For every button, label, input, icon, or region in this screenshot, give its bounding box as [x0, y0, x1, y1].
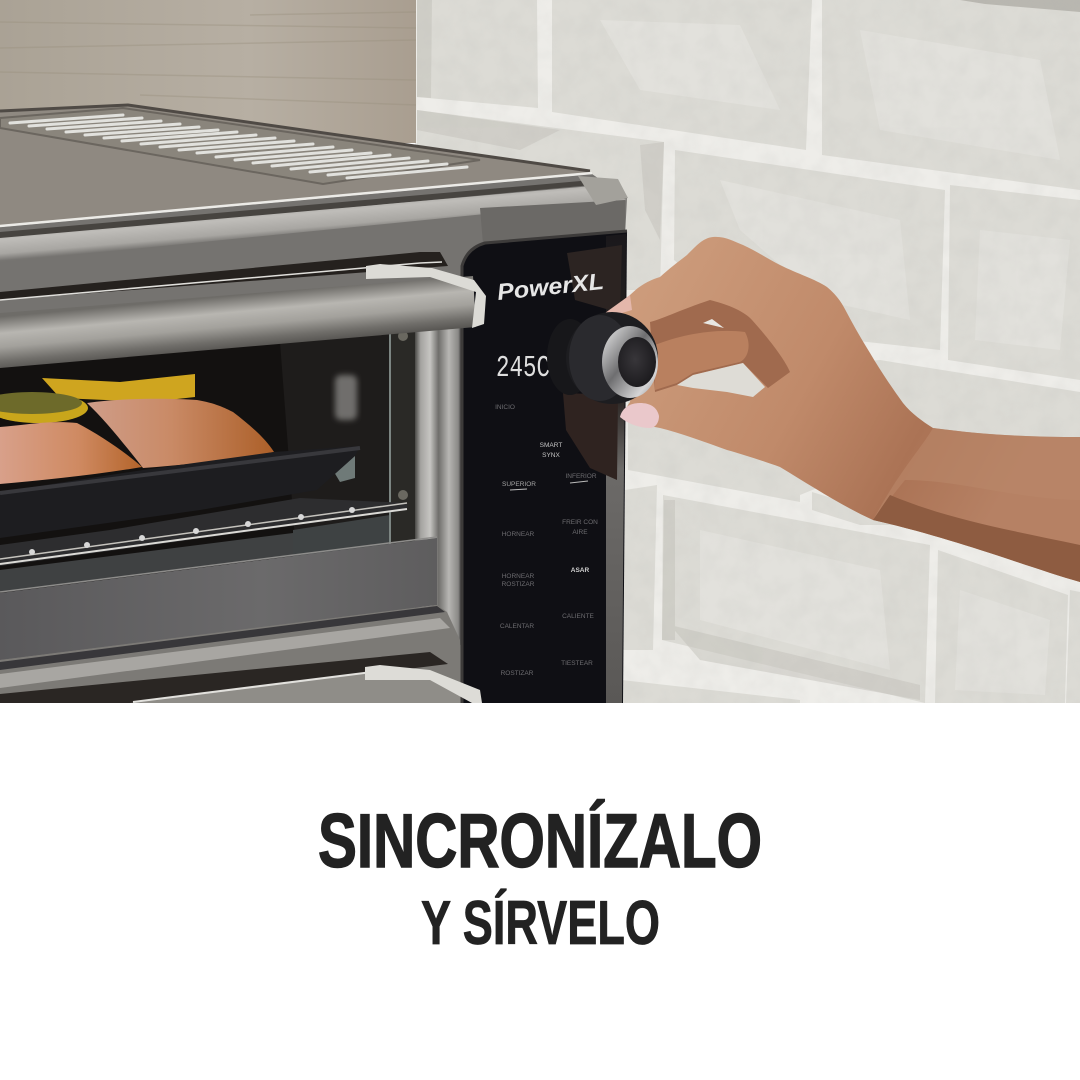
lower handle body	[135, 671, 467, 703]
middle finger	[655, 331, 749, 390]
panel button labels: TIESTEAR	[561, 660, 593, 667]
front frame backing	[0, 174, 627, 703]
white caption panel	[0, 703, 1080, 1080]
dial rear cylinder	[547, 319, 593, 395]
panel button labels: INFERIOR	[565, 473, 597, 480]
wood grain	[0, 12, 416, 105]
subheading: Y SÍRVELO	[421, 889, 660, 958]
lower door slot	[0, 652, 448, 703]
upper door slot	[0, 252, 448, 300]
panel button labels: AIRE	[572, 529, 588, 536]
panel button labels: SUPERIOR	[502, 481, 536, 488]
upper handle	[0, 276, 476, 368]
hand reflections	[567, 245, 622, 313]
panel button labels: SYNX	[542, 452, 561, 459]
dial black ring	[566, 312, 658, 404]
panel button labels: CALENTAR	[500, 623, 534, 630]
wood panel	[0, 0, 416, 143]
panel button labels: HORNEAR	[502, 573, 535, 580]
brick texture	[415, 0, 1080, 703]
panel button labels: HORNEAR	[502, 531, 535, 538]
control dial	[547, 312, 658, 404]
door lower panel	[0, 538, 437, 660]
side steel strips	[415, 325, 462, 645]
baking tray	[0, 446, 360, 538]
fingernails	[605, 295, 659, 428]
top vent panel	[0, 108, 480, 184]
gap between thumb and finger	[677, 363, 765, 397]
lower handle bracket	[365, 665, 482, 703]
oven window	[0, 325, 415, 600]
oven rack	[0, 498, 407, 566]
brand logo: PowerXL	[496, 268, 605, 305]
hand silhouette	[607, 237, 1080, 582]
panel button labels: ASAR	[571, 567, 590, 574]
shelf beneath rack	[0, 533, 293, 592]
panel button labels: FREIR CON	[562, 519, 598, 526]
panel button labels: ROSTIZAR	[502, 581, 535, 588]
shadow between fingers	[650, 300, 790, 392]
panel button labels: ROSTIZAR	[501, 670, 534, 677]
top edge highlight	[0, 173, 592, 226]
dial chrome rim	[602, 326, 658, 398]
temperature display: 245C	[496, 351, 550, 386]
panel right edge	[606, 234, 626, 703]
panel button labels	[495, 404, 598, 677]
panel button labels: CALIENTE	[562, 613, 595, 620]
lower frame	[0, 605, 462, 703]
lemon slices	[42, 374, 195, 402]
top vents	[10, 115, 467, 178]
right corner cap	[578, 176, 628, 205]
panel button labels: INICIO	[495, 404, 515, 411]
oven body	[0, 105, 628, 703]
heading: SINCRONÍZALO	[318, 799, 762, 884]
wall: white brick	[415, 0, 1080, 703]
small gap between fingers	[703, 319, 724, 328]
wrist shading	[873, 428, 1080, 520]
photo: oven with hand turning the dial	[0, 0, 1080, 703]
upper handle bracket	[366, 264, 486, 328]
window screws	[398, 331, 408, 341]
hand and forearm	[605, 237, 1080, 582]
brick highlights	[600, 20, 1070, 695]
salmon fillets	[87, 399, 274, 468]
panel button labels: SMART	[540, 442, 562, 449]
forearm underside shadow	[873, 495, 1080, 582]
control panel	[462, 231, 627, 703]
dial cap	[618, 337, 656, 387]
oven top surface	[0, 105, 592, 226]
